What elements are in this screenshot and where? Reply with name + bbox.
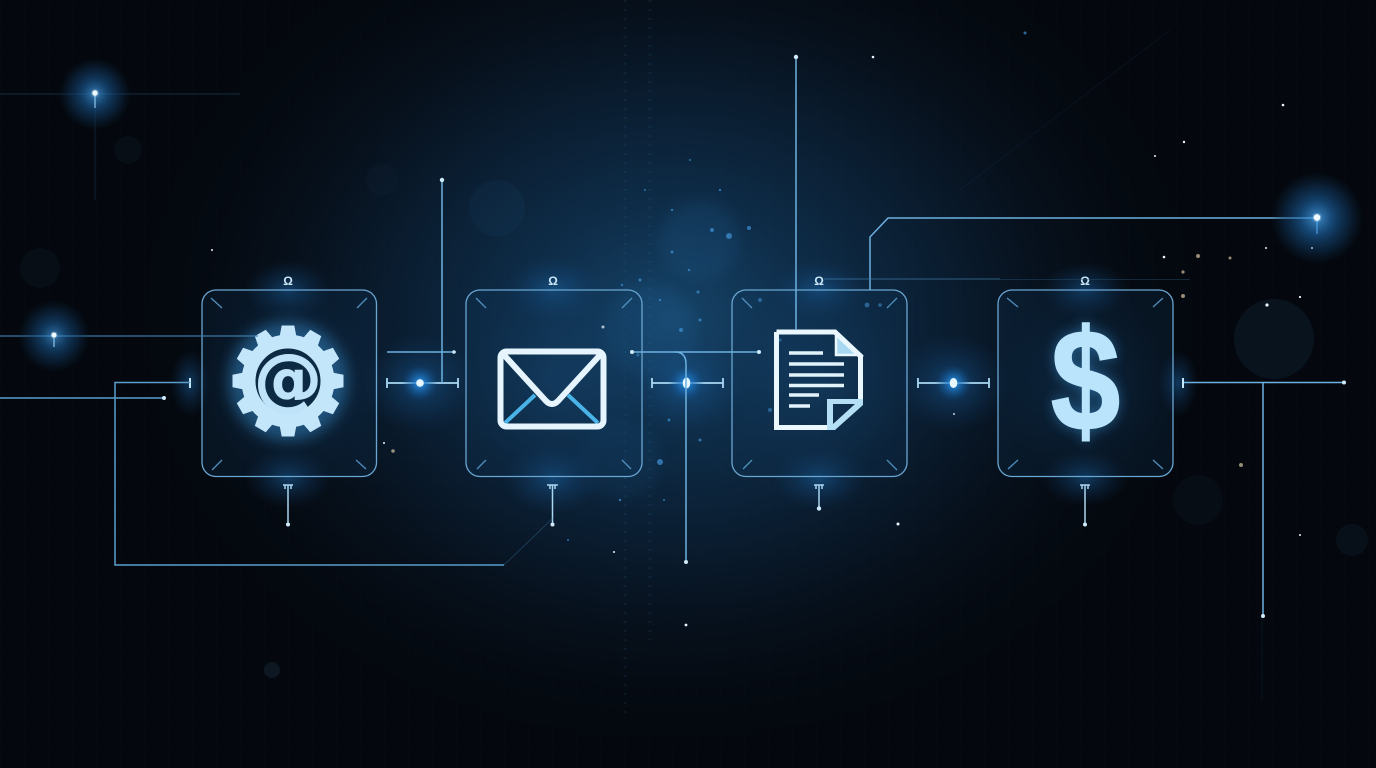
top connector glyphs: Ω — [283, 274, 293, 288]
panel: email step — [466, 290, 642, 476]
panel glows — [170, 256, 1198, 514]
top connector glyphs — [283, 274, 1090, 288]
icon: document — [776, 332, 863, 430]
glowing node: top left — [59, 58, 131, 130]
icon: envelope — [500, 352, 604, 426]
top connector glyphs: Ω — [814, 274, 824, 288]
bottom connector stems — [283, 485, 1090, 526]
connector: panel 2 to panel 3 — [652, 365, 723, 401]
icon: dollar sign: $ — [1051, 300, 1120, 461]
panel: settings email step — [202, 290, 376, 476]
panel: document step — [732, 290, 907, 476]
connector: panel 1 to panel 2 — [387, 365, 458, 401]
line end dots — [162, 55, 1346, 618]
glowing node: top right — [1271, 172, 1363, 264]
icon: dollar sign: $ — [1051, 300, 1120, 461]
panel: payment step — [998, 290, 1173, 476]
top connector glyphs: Ω — [1080, 274, 1090, 288]
circuit lines — [0, 57, 1344, 616]
icon: gear with at sign — [228, 321, 348, 441]
top connector glyphs: Ω — [548, 274, 558, 288]
background particles — [211, 32, 1313, 626]
connector: panel 3 to panel 4 — [918, 365, 989, 401]
icon: gear with at sign: @ — [254, 340, 322, 419]
glowing node: middle left — [18, 300, 90, 372]
